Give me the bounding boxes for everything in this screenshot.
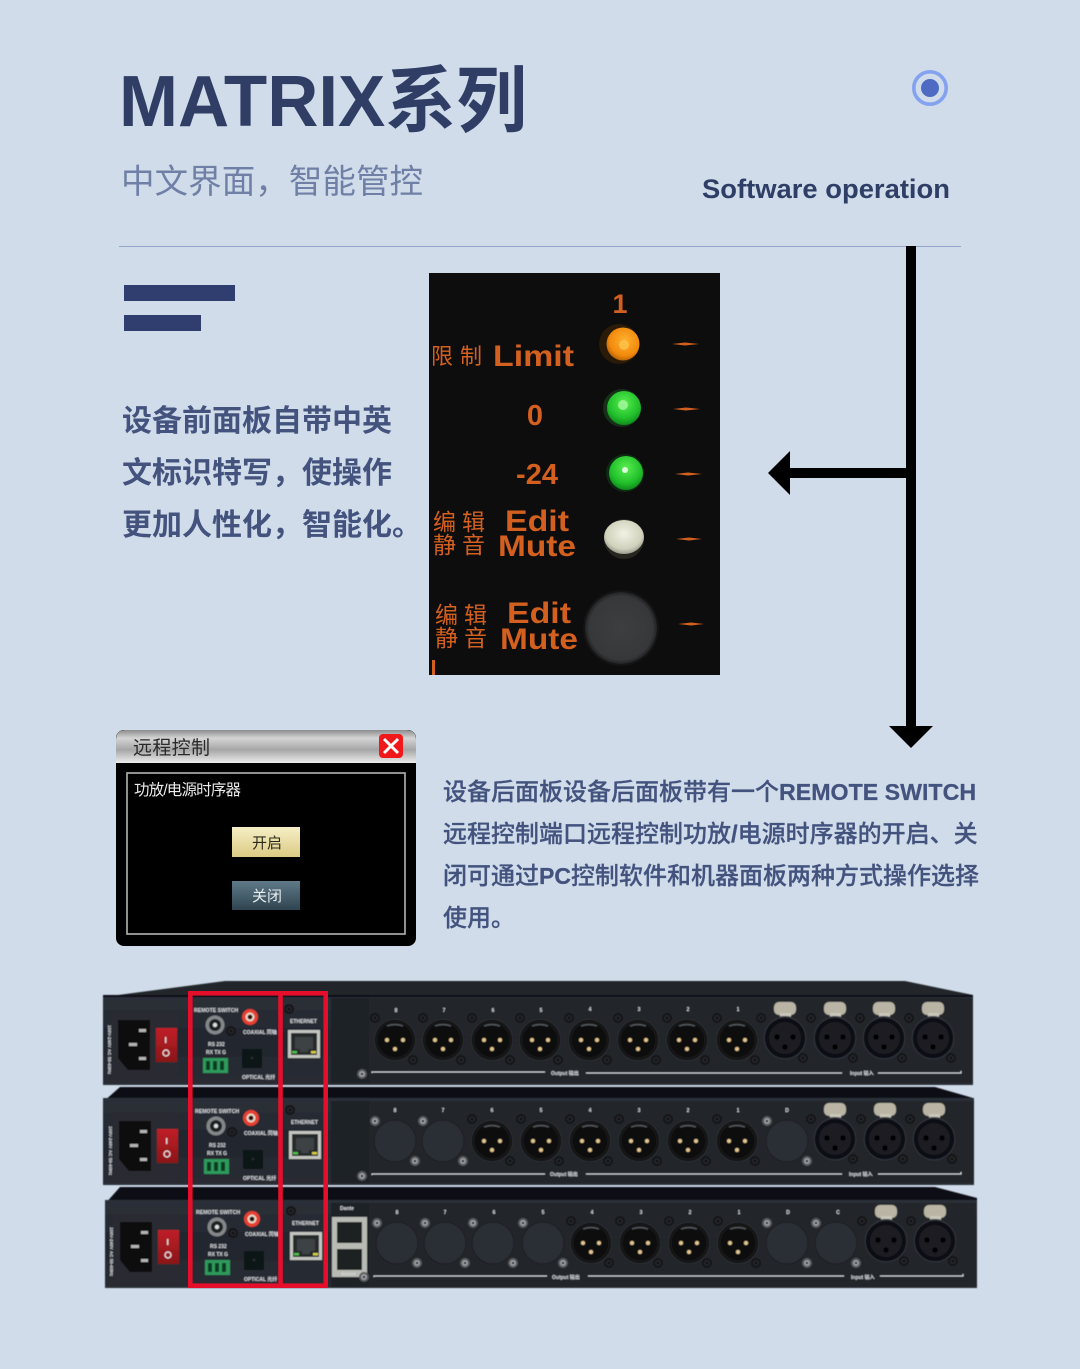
text block: rear panel description: 设备后面板设备后面板带有一个REMOTE SWITCH — [443, 779, 976, 806]
rack unit 3: D — [786, 1210, 790, 1216]
arrow: left to front panel photo — [768, 451, 908, 495]
close button — [379, 734, 403, 758]
Edit Mute label lower — [435, 597, 578, 656]
dual network ports: Second — [341, 1271, 356, 1276]
button: off: 关闭 — [252, 888, 282, 905]
dual network ports — [332, 1206, 367, 1277]
channel number: 1 — [612, 289, 628, 319]
header divider — [119, 246, 961, 247]
Edit Mute label upper: 静音 — [433, 532, 491, 558]
rack unit 3: 1 — [738, 1210, 741, 1216]
title: MATRIX系列 — [119, 62, 527, 142]
text block: front panel description: 更加人性化，智能化。 — [122, 509, 422, 542]
rack unit 2: 7 — [442, 1108, 445, 1114]
rack unit 1: 2 — [687, 1007, 690, 1013]
rack unit 3: 8 — [396, 1210, 399, 1216]
rack unit 1: 1 — [737, 1007, 740, 1013]
label -24: -24 — [516, 459, 558, 491]
rack unit 3: C — [836, 1210, 840, 1216]
icon: radio target — [914, 72, 946, 104]
arrow: down to rear panel text — [889, 246, 933, 748]
Edit Mute label lower: Edit — [507, 597, 571, 630]
LED: white — [604, 519, 644, 559]
rack unit 1: Input 输入 — [850, 1070, 874, 1077]
rack unit 1: 6 — [492, 1008, 495, 1014]
text block: front panel description: 文标识特写，使操作 — [122, 457, 392, 490]
rack unit 3: Input 输入 — [851, 1274, 875, 1281]
red highlight frames — [190, 993, 326, 1286]
push button — [583, 590, 659, 666]
rack unit 2: 6 — [491, 1108, 494, 1114]
icon: heading bars — [124, 285, 235, 331]
text block: front panel description — [122, 405, 422, 542]
Edit Mute label lower: 编辑 — [435, 602, 493, 628]
button: on: 开启 — [252, 835, 282, 852]
rack unit 2 — [103, 1087, 974, 1185]
rack unit 2: 5 — [540, 1108, 543, 1114]
text block: rear panel description: 使用。 — [443, 905, 515, 932]
rack unit 2: Output 输出 — [550, 1171, 578, 1178]
rack unit 2: 2 — [687, 1108, 690, 1114]
rack unit 2: 3 — [638, 1108, 641, 1114]
Edit Mute label lower: 静音 — [435, 625, 493, 651]
text block: rear panel description: 远程控制端口远程控制功放/电源时序器的开启、关 — [443, 821, 978, 848]
rack unit 1: 4 — [589, 1007, 592, 1013]
dialog title bar — [116, 730, 416, 763]
dialog title bar: 远程控制 — [133, 737, 210, 759]
LED: green 0 — [603, 389, 641, 427]
Edit Mute label lower: Mute — [500, 623, 578, 656]
text block: front panel description: 设备前面板自带中英 — [122, 405, 392, 438]
rack unit 3: 5 — [542, 1210, 545, 1216]
device label: 功放/电源时序器 — [134, 781, 241, 799]
subtitle: 中文界面，智能管控 — [121, 164, 423, 201]
photo: three stacked rack units, rear view — [103, 981, 977, 1288]
rack unit 1 — [103, 981, 973, 1085]
label 0: 0 — [527, 400, 543, 432]
rack unit 1: 3 — [638, 1007, 641, 1013]
Limit row: Limit — [493, 340, 574, 373]
rack unit 3: 2 — [689, 1210, 692, 1216]
rack unit 3: Output 输出 — [552, 1274, 580, 1281]
rack unit 3 — [105, 1187, 977, 1288]
rack unit 1: Output 输出 — [551, 1070, 579, 1077]
Limit row — [431, 340, 574, 373]
inner frame — [127, 773, 405, 934]
rack unit 3: 6 — [493, 1210, 496, 1216]
text block: rear panel description — [443, 779, 979, 932]
Edit Mute label upper: 编辑 — [433, 509, 491, 535]
rack unit 3: 7 — [444, 1210, 447, 1216]
Edit Mute label upper: Edit — [505, 505, 569, 538]
rack unit 3: 4 — [591, 1210, 594, 1216]
rack unit 1: 5 — [540, 1008, 543, 1014]
LED: orange — [599, 324, 640, 364]
LED: green -24 — [606, 454, 644, 492]
panel: front panel LED photo — [429, 273, 720, 675]
rack unit 1: 7 — [443, 1008, 446, 1014]
button: on — [232, 827, 300, 857]
button: off — [232, 881, 300, 910]
rack unit 2: 4 — [589, 1108, 592, 1114]
dual network ports: Dante — [340, 1206, 354, 1212]
Edit Mute label upper: Mute — [498, 530, 576, 563]
tick marks — [432, 342, 704, 675]
rack unit 2: 1 — [737, 1108, 740, 1114]
panel: remote control dialog — [116, 730, 416, 946]
rack unit 2: Input 输入 — [849, 1171, 873, 1178]
Limit row: 限制 — [431, 344, 489, 369]
rack unit 2: D — [785, 1108, 789, 1114]
rack unit 3: 3 — [640, 1210, 643, 1216]
text block: rear panel description: 闭可通过PC控制软件和机器面板两种方式操作选择 — [443, 863, 979, 890]
english caption: Software operation — [702, 174, 950, 204]
Edit Mute label upper — [433, 505, 576, 563]
rack unit 1: 8 — [395, 1008, 398, 1014]
rack unit 2: 8 — [394, 1108, 397, 1114]
